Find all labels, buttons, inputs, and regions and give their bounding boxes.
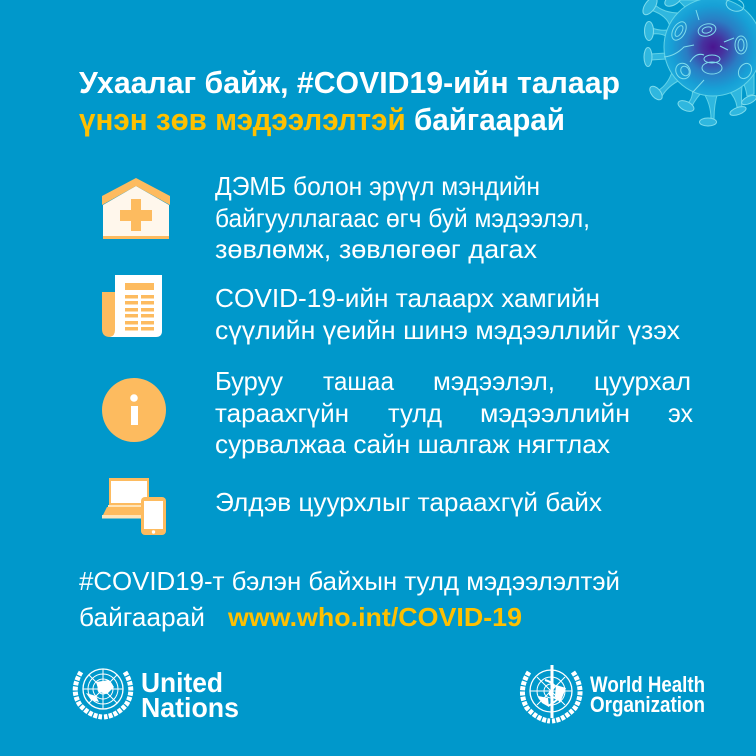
text: follow WHO advice: байгууллагаас өгч буй мэдээлэл, xyxy=(215,203,590,233)
title: үнэн зөв мэдээлэлтэй байгаарай xyxy=(79,102,565,137)
call to action: #COVID19-т бэлэн байхын тулд мэдээлэлтэй xyxy=(79,566,620,596)
wordmark xyxy=(141,667,239,723)
text: do not spread rumours: Элдэв цуурхлыг тараахгүй байх xyxy=(215,487,602,517)
wordmark: Nations xyxy=(141,692,239,723)
text: check sources xyxy=(215,366,693,459)
text: check sources: сурвалжаа сайн шалгаж нягтлах xyxy=(215,429,610,459)
icon: laptop and phone xyxy=(102,478,166,535)
text: check sources: эх xyxy=(668,398,693,428)
text: latest news xyxy=(215,283,680,345)
logo: World Health Organization xyxy=(522,665,705,721)
call to action: www.who.int/COVID-19 xyxy=(227,602,522,632)
emblem: UN globe and wreath xyxy=(75,669,131,717)
virus body xyxy=(664,0,756,96)
text: check sources: цуурхал xyxy=(594,366,691,396)
wordmark xyxy=(590,672,705,717)
wordmark: World Health xyxy=(590,672,705,697)
title xyxy=(79,65,620,137)
title: Ухаалаг байж, #COVID19-ийн талаар xyxy=(79,65,620,100)
text: follow WHO advice: ДЭМБ болон эрүүл мэндийн xyxy=(215,171,540,201)
text: follow WHO advice: зөвлөмж, зөвлөгөөг дагах xyxy=(215,234,537,264)
text: follow WHO advice xyxy=(215,171,590,264)
text: check sources: мэдээлэл, xyxy=(433,366,555,396)
call to action xyxy=(79,566,620,632)
text: check sources: тараахгүйн xyxy=(215,398,349,428)
text: check sources: тулд xyxy=(388,398,442,428)
text: latest news: сүүлийн үеийн шинэ мэдээллийг үзэх xyxy=(215,315,680,345)
logo: United Nations xyxy=(75,667,239,723)
icon: coronavirus illustration xyxy=(640,0,756,126)
wordmark: United xyxy=(141,667,223,698)
text: latest news: COVID-19-ийн талаарх хамгийн xyxy=(215,283,600,313)
text: check sources: Буруу xyxy=(215,366,283,396)
text: check sources: ташаа xyxy=(323,366,395,396)
wordmark: Organization xyxy=(590,692,705,717)
icon: information circle xyxy=(102,378,166,442)
icon: hospital house xyxy=(102,178,170,239)
text: check sources: мэдээллийн xyxy=(480,398,630,428)
emblem: WHO globe, staff and wreath xyxy=(522,665,580,721)
icon: newspaper xyxy=(102,275,162,337)
call to action: байгаарай xyxy=(79,602,205,632)
